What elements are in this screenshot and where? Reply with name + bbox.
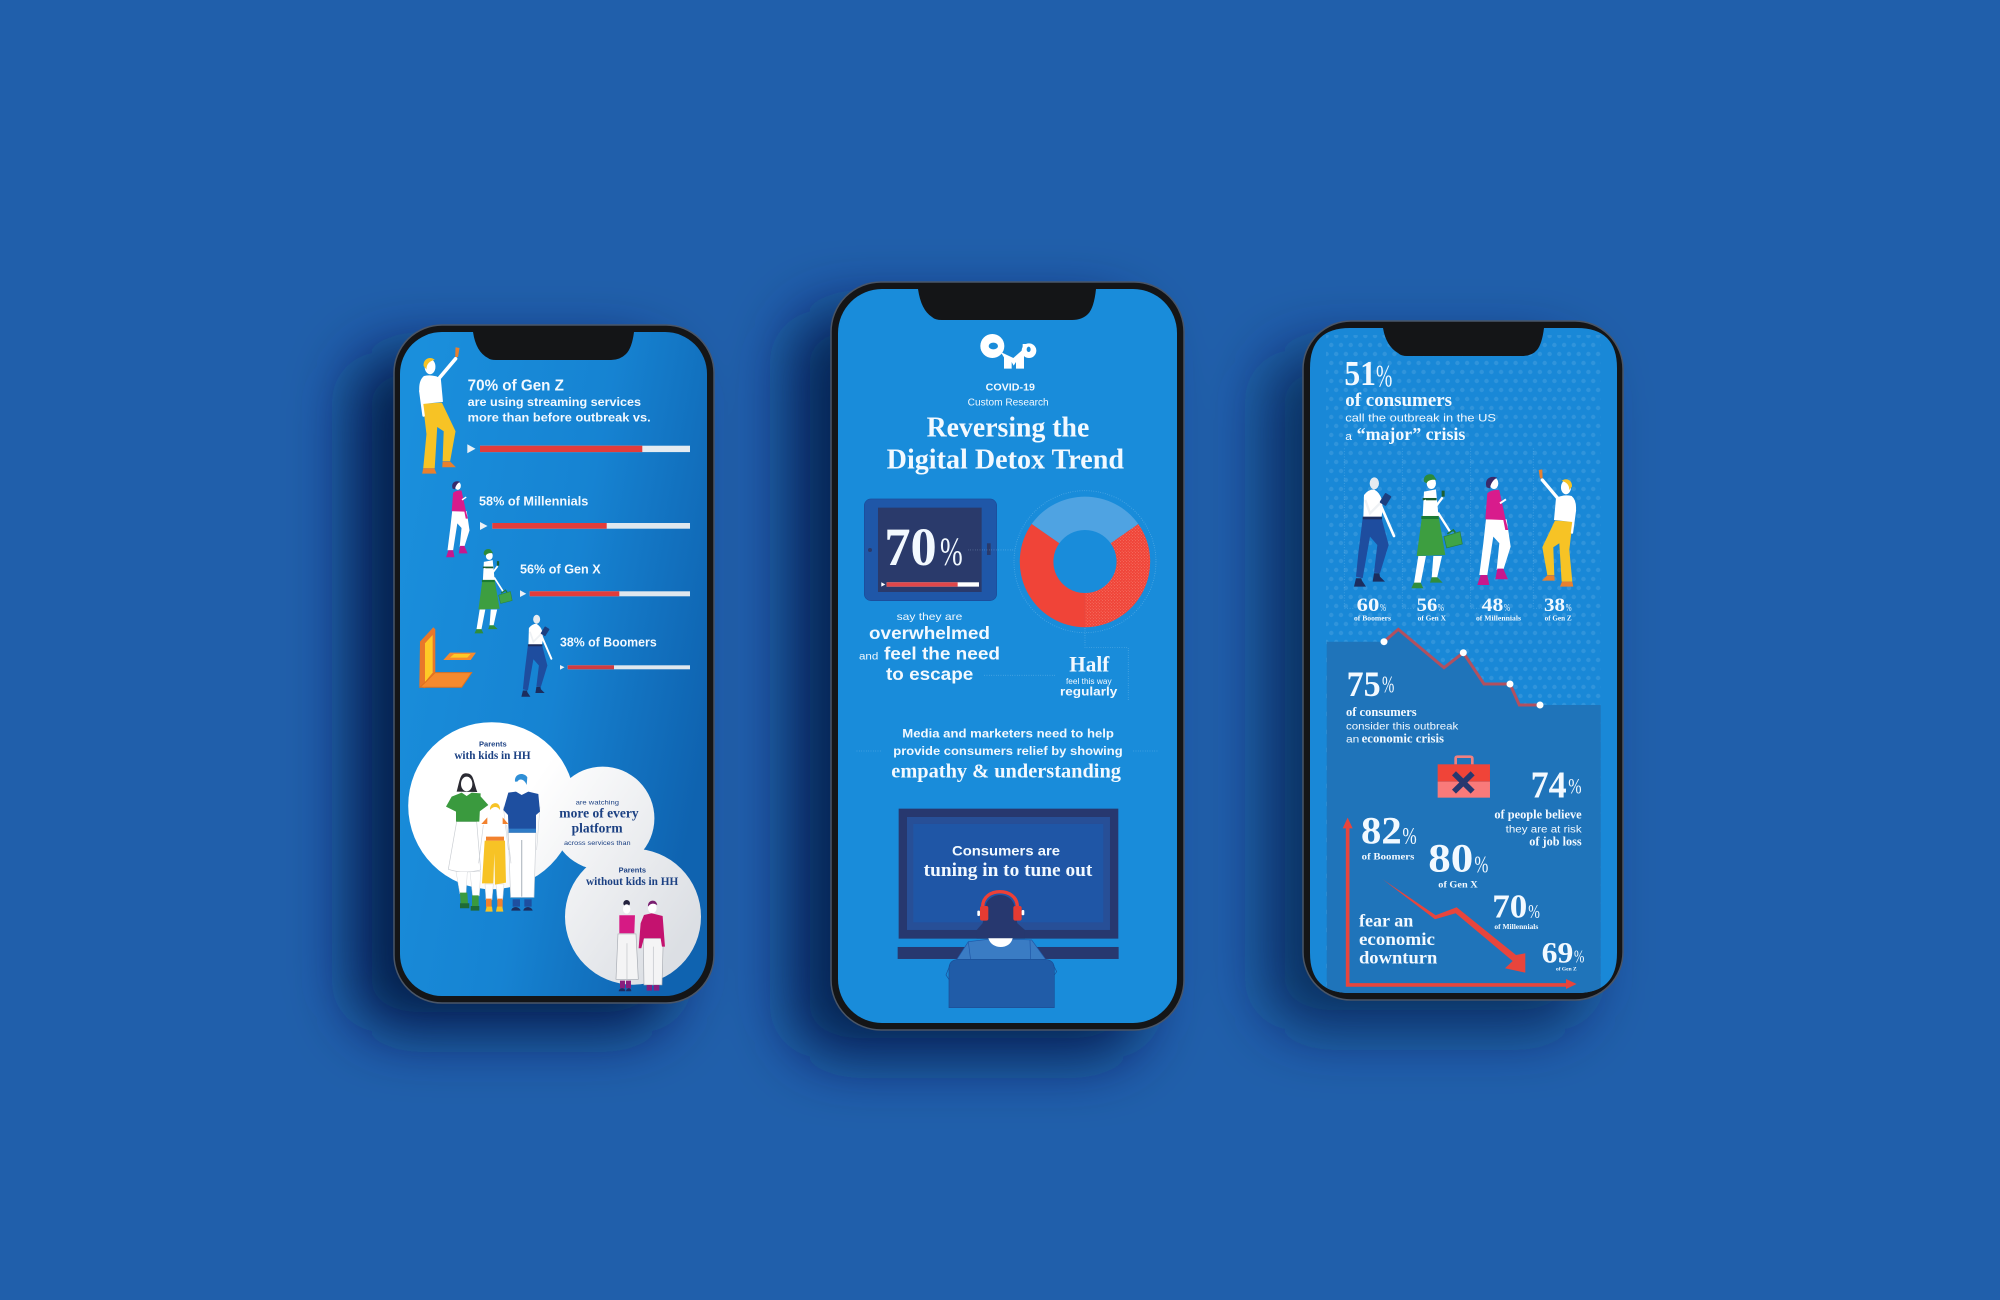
stat: 74% job loss: they are at risk bbox=[1506, 824, 1582, 835]
stat: 80% of Gen X: of Gen X bbox=[1438, 880, 1478, 890]
title: Digital Detox Trend bbox=[887, 443, 1124, 475]
text: half regularly: regularly bbox=[1060, 685, 1118, 699]
stat: 70% of Gen Z bbox=[468, 378, 651, 425]
stat: 70% of Gen Z: 70% of Gen Z bbox=[468, 378, 564, 395]
phone shadows bbox=[352, 310, 1585, 1058]
stat: 60% of Boomers: % bbox=[1380, 603, 1386, 614]
text: half regularly: Half bbox=[1069, 652, 1110, 677]
stat: 38% of Boomers: 38% of Boomers bbox=[560, 634, 657, 649]
stat: 48% of Millennials: % bbox=[1504, 603, 1510, 614]
stat: 75% economic crisis: of consumers bbox=[1346, 705, 1417, 719]
phone 3 frame bbox=[1303, 321, 1623, 1000]
label: parents with kids bbox=[454, 742, 531, 762]
figure: Millennial bbox=[1477, 477, 1511, 585]
text: overwhelmed: and bbox=[859, 651, 879, 662]
stat: 74% job loss: % bbox=[1568, 773, 1582, 798]
stat: 80% of Gen X bbox=[1428, 836, 1488, 890]
stat: 70% of Gen Z: more than before outbreak vs. bbox=[468, 411, 651, 425]
column guide lines bbox=[1344, 448, 1543, 608]
stat: 51% major crisis: of consumers bbox=[1345, 390, 1452, 411]
phone 1 screen bbox=[400, 332, 707, 996]
icon: tablet with 70% bbox=[864, 499, 997, 601]
chart axes bbox=[1343, 818, 1577, 989]
figure: Gen X bbox=[1411, 474, 1462, 588]
text: overwhelmed: overwhelmed bbox=[869, 623, 990, 643]
stat: 82% of Boomers: 82 bbox=[1361, 808, 1402, 852]
kicker: Custom Research bbox=[968, 398, 1049, 409]
text: fear an economic downturn: economic bbox=[1359, 929, 1435, 949]
stat: 51% major crisis: “major” crisis bbox=[1357, 424, 1465, 444]
text: overwhelmed: to escape bbox=[886, 664, 974, 684]
stat: 48% of Millennials: 48 bbox=[1482, 595, 1503, 616]
stat: 80% of Gen X: 80 bbox=[1428, 836, 1473, 881]
bar: 38% bbox=[560, 665, 690, 670]
donut chart: half feel this way bbox=[968, 491, 1156, 702]
stat: 70% of Millennials: of Millennials bbox=[1494, 922, 1538, 931]
label: parents with kids: Parents bbox=[479, 742, 507, 749]
label: parents without kids: without kids in HH bbox=[586, 874, 679, 888]
stat: 70% of Millennials: % bbox=[1528, 901, 1540, 923]
text: media and marketers: provide consumers relief by showing bbox=[893, 744, 1123, 758]
label: are watching more of every platform: more of every bbox=[559, 806, 639, 821]
label: are watching more of every platform: platform bbox=[572, 820, 623, 835]
phone 2: digital detox bbox=[831, 282, 1184, 1030]
stat: 82% of Boomers: of Boomers bbox=[1362, 852, 1415, 862]
title: Reversing the bbox=[927, 412, 1089, 444]
label: parents with kids: with kids in HH bbox=[454, 748, 531, 762]
text: fear an economic downturn bbox=[1359, 911, 1437, 967]
illustration: person at monitor: Consumers are bbox=[952, 842, 1060, 858]
stat: 51% major crisis: % bbox=[1376, 358, 1392, 393]
stat: 51% major crisis: a bbox=[1345, 431, 1353, 443]
text: media and marketers: Media and marketers need to help bbox=[902, 726, 1114, 740]
stat: 38% of Gen Z: of Gen Z bbox=[1545, 614, 1572, 623]
text: fear an economic downturn: downturn bbox=[1359, 947, 1437, 967]
kicker: COVID-19 bbox=[986, 383, 1035, 394]
text: overwhelmed: feel the need bbox=[884, 643, 1000, 663]
stat: 38% of Gen Z: % bbox=[1566, 603, 1572, 614]
arrow: downturn trend bbox=[1383, 879, 1525, 973]
furniture: orange chair bbox=[419, 627, 476, 688]
couple without kids bbox=[616, 900, 665, 991]
stat: 70% of Millennials: 70 bbox=[1492, 888, 1527, 925]
bar: 56% bbox=[520, 590, 690, 597]
figure: Millennial bbox=[446, 481, 470, 557]
figure: Gen Z bbox=[1539, 469, 1576, 587]
stat: 60% of Boomers: of Boomers bbox=[1354, 614, 1391, 623]
illustration: person at monitor: tuning in to tune out bbox=[924, 860, 1093, 881]
text: half regularly bbox=[1060, 652, 1118, 699]
phone 3 screen bbox=[1310, 328, 1617, 993]
kicker bbox=[968, 383, 1049, 409]
illustration: person at monitor bbox=[898, 809, 1119, 1008]
stat: 60% of Boomers bbox=[1354, 595, 1391, 623]
phone 1 frame bbox=[394, 325, 714, 1003]
text: fear an economic downturn: fear an bbox=[1359, 911, 1413, 931]
label: are watching more of every platform: across services than bbox=[564, 840, 631, 847]
stat: 38% of Gen Z: 38 bbox=[1544, 595, 1565, 616]
stat: 56% of Gen X: 56 bbox=[1417, 595, 1437, 616]
OMP logo bbox=[980, 334, 1036, 369]
darker panel bbox=[1327, 629, 1601, 993]
stat: 69% of Gen Z: 69 bbox=[1542, 937, 1573, 969]
figure: Boomer bbox=[521, 615, 551, 697]
family with kids bbox=[446, 773, 540, 912]
stat: 69% of Gen Z: of Gen Z bbox=[1556, 967, 1577, 973]
stat: 74% job loss bbox=[1494, 765, 1582, 849]
stat: 51% major crisis: call the outbreak in the US bbox=[1345, 413, 1496, 425]
label: parents without kids: Parents bbox=[619, 867, 646, 874]
stat: 74% job loss: of people believe bbox=[1494, 807, 1582, 821]
bubbles: parents comparison bbox=[408, 722, 701, 985]
stat: 74% job loss: 74 bbox=[1531, 765, 1567, 807]
stat: 56% of Gen X: 56% of Gen X bbox=[520, 561, 601, 576]
phone 1 notch bbox=[473, 332, 634, 360]
stat: 58% of Millennials: 58% of Millennials bbox=[479, 493, 588, 508]
stat: 48% of Millennials: of Millennials bbox=[1476, 614, 1521, 623]
icon: briefcase with X bbox=[1438, 757, 1490, 798]
stat: 38% of Gen Z bbox=[1544, 595, 1572, 623]
stat: 70% of Gen Z: are using streaming services bbox=[468, 395, 641, 409]
title bbox=[887, 412, 1124, 475]
stat: 82% of Boomers: % bbox=[1402, 823, 1417, 850]
label: are watching more of every platform bbox=[559, 799, 639, 847]
phone 3: crisis perception bbox=[1303, 321, 1623, 1000]
label: are watching more of every platform: are watching bbox=[576, 799, 619, 806]
stat: 60% of Boomers: 60 bbox=[1357, 595, 1379, 616]
bar: 70% bbox=[467, 444, 690, 453]
phone 1: streaming by generation bbox=[394, 325, 714, 1003]
figure: Boomer bbox=[1354, 477, 1394, 587]
text: media and marketers: empathy & understanding bbox=[891, 760, 1121, 782]
text: overwhelmed bbox=[859, 612, 1000, 684]
stat: 56% of Gen X: % bbox=[1438, 603, 1444, 614]
bar: 58% bbox=[480, 522, 690, 530]
stat: 75% economic crisis: economic crisis bbox=[1362, 732, 1444, 746]
text: overwhelmed: say they are bbox=[897, 612, 963, 623]
stat: 74% job loss: of job loss bbox=[1529, 835, 1582, 849]
stat: 51% major crisis: 51 bbox=[1344, 354, 1376, 393]
stat: 75% economic crisis: 75 bbox=[1347, 664, 1381, 704]
stat: 51% major crisis bbox=[1344, 354, 1496, 444]
stat: 69% of Gen Z bbox=[1542, 937, 1584, 973]
stat: 56% of Gen X: of Gen X bbox=[1418, 614, 1446, 623]
phone 2 frame bbox=[831, 282, 1184, 1030]
stat: 69% of Gen Z: % bbox=[1574, 947, 1584, 967]
stat: 75% economic crisis: an bbox=[1346, 735, 1359, 746]
stat: 75% economic crisis: % bbox=[1382, 673, 1394, 699]
declining line chart bbox=[1380, 629, 1544, 708]
stat: 56% of Gen X bbox=[1417, 595, 1446, 623]
stat: 80% of Gen X: % bbox=[1474, 852, 1488, 878]
icon: tablet with 70%: % bbox=[940, 529, 963, 574]
figure: Gen Z bbox=[419, 347, 459, 474]
text: half regularly: feel this way bbox=[1066, 677, 1112, 686]
phone 2 notch bbox=[918, 289, 1096, 320]
icon: tablet with 70%: 70 bbox=[884, 517, 937, 577]
stat: 82% of Boomers bbox=[1361, 808, 1417, 862]
stat: 75% economic crisis: consider this outbreak bbox=[1346, 721, 1459, 732]
stat: 48% of Millennials bbox=[1476, 595, 1521, 623]
phone 3 notch bbox=[1383, 328, 1544, 356]
stat: 75% economic crisis bbox=[1346, 664, 1459, 746]
label: parents without kids bbox=[586, 867, 679, 888]
figure: Gen X bbox=[474, 549, 512, 633]
text: media and marketers bbox=[857, 726, 1157, 782]
stat: 70% of Millennials bbox=[1492, 888, 1540, 931]
phone 2 screen bbox=[838, 289, 1177, 1023]
